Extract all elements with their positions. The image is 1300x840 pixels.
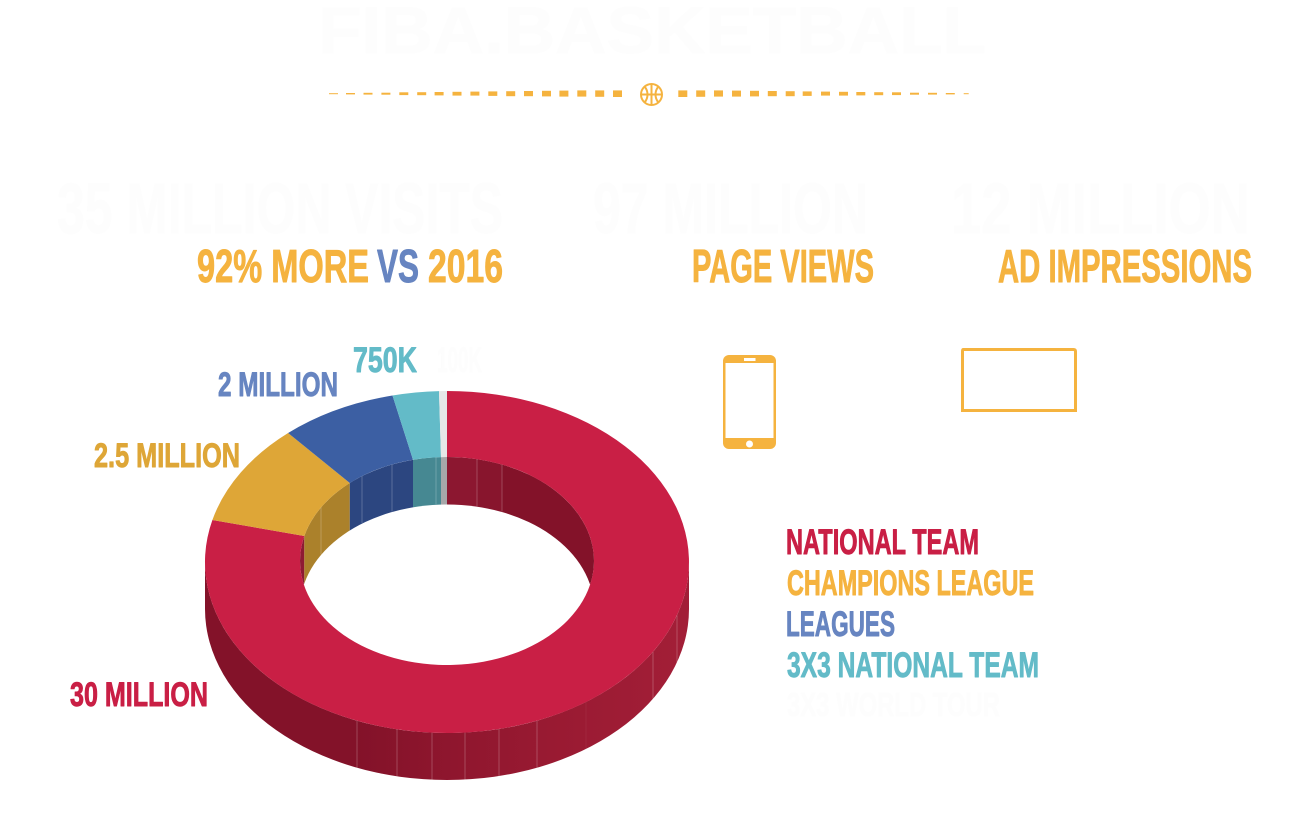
chart label: 750K: 750K — [353, 341, 417, 380]
icon: tablet screen — [962, 350, 1076, 410]
segment: champions league 2.5 million — [212, 433, 350, 536]
stat caption: 92% more vs 2016: 2016 — [428, 240, 503, 292]
icon: basketball — [641, 84, 662, 105]
chart side wall — [205, 562, 689, 780]
chart label: 2.5 million: 2.5 MILLION — [94, 437, 240, 475]
segment: 3x3 world tour 100K — [439, 391, 447, 457]
legend item: national team: NATIONAL TEAM — [786, 523, 979, 562]
stat: 12 million ad impressions — [951, 170, 1252, 292]
stat: 35 million visits: 35 MILLION VISITS — [57, 170, 503, 249]
legend item: champions league: CHAMPIONS LEAGUE — [787, 564, 1034, 603]
chart label: 2 million: 2 MILLION — [218, 366, 338, 404]
chart label: 100K: 100K — [437, 341, 482, 380]
segment: 3x3 national team 750K — [392, 391, 441, 460]
stat caption: 92% more vs 2016: VS — [377, 240, 419, 292]
icon: smartphone — [723, 355, 776, 449]
chart label: 30 million: 30 MILLION — [70, 676, 208, 714]
stat: 97 million page views: 97 MILLION — [593, 170, 868, 249]
stat caption: 92% more vs 2016: 92% MORE — [197, 240, 369, 292]
divider with basketball icon — [329, 84, 969, 105]
segment: leagues 2 million — [288, 396, 413, 483]
legend item: 3x3 world tour: 3X3 WORLD TOUR — [787, 686, 1000, 723]
stat caption: page views: PAGE VIEWS — [692, 240, 874, 292]
chart inner wall — [300, 457, 594, 620]
segment: national team 30 million — [205, 391, 689, 733]
stat: 35 million visits — [57, 170, 503, 292]
legend item: leagues: LEAGUES — [786, 605, 895, 644]
legend — [786, 523, 1039, 723]
legend item: 3x3 national team: 3X3 NATIONAL TEAM — [787, 646, 1039, 685]
stat: 97 million page views — [593, 170, 874, 292]
donut chart — [205, 391, 689, 780]
